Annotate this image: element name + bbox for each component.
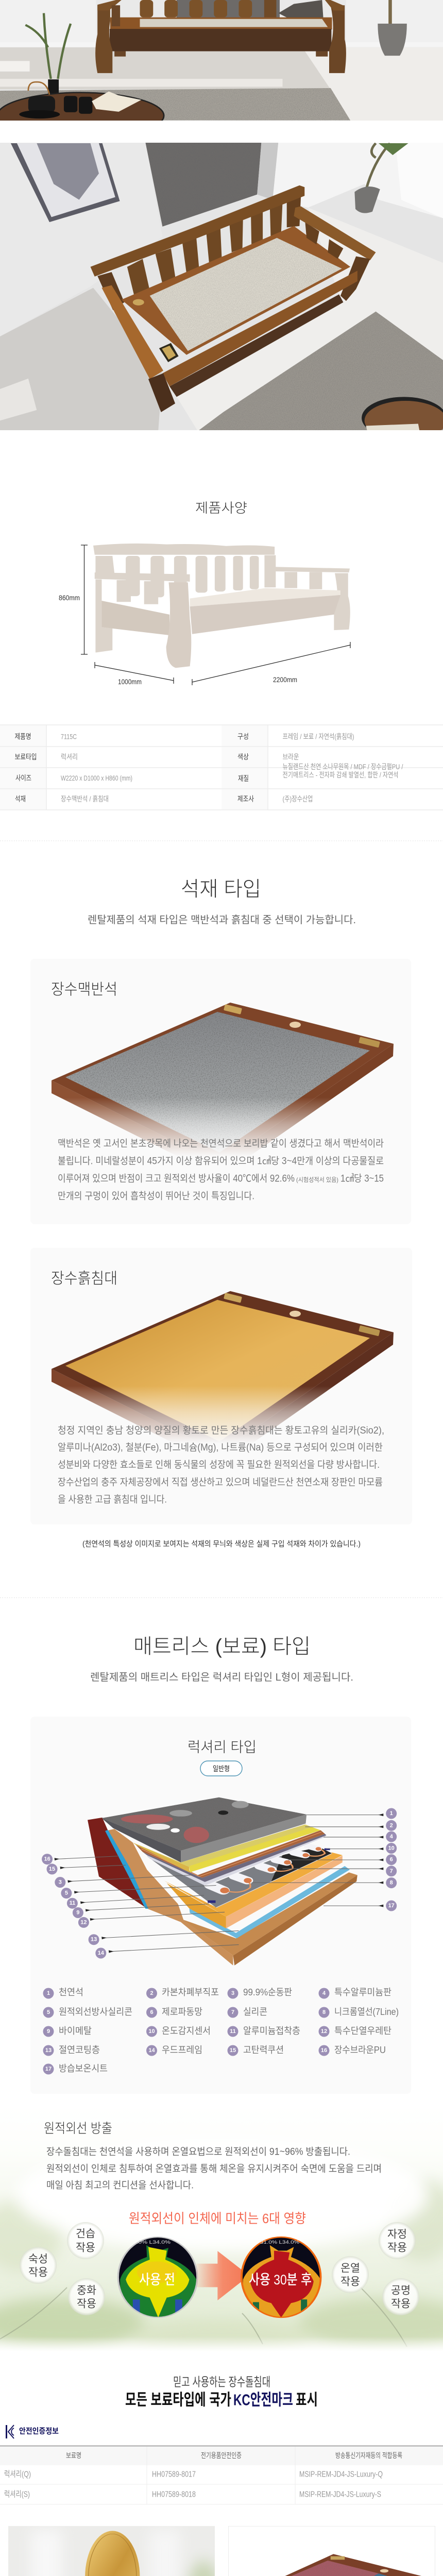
legend: numbered layer list: 15: [230, 2047, 236, 2054]
photo: sofa front view: [0, 0, 443, 121]
table: product specifications: W2220 x D1000 x H860 (mm): [61, 774, 132, 782]
callout badges: layer numbers: 7: [390, 1868, 393, 1874]
table: KC certification: MSIP-REM-JD4-JS-Luxury-S: [299, 2490, 381, 2499]
heading: KC safety mark: 모든 보료타입에 국가: [125, 2391, 231, 2409]
text block: elvan stone description: [58, 1138, 384, 1201]
table: product specifications: 뉴질랜드산 천연 소나무원목 / MDF / 장수금펄PU /: [282, 762, 403, 771]
table: product specifications: 색상: [237, 753, 249, 761]
table: KC certification: HH07589-8017: [152, 2470, 196, 2479]
callout badges: layer numbers: 5: [65, 1890, 68, 1896]
text block: far-infrared description: 매일 아침 최고의 컨디션을 선사합니다.: [46, 2179, 194, 2191]
button: standard: 일반형: [213, 1765, 230, 1773]
thermal image: before use: .0% L34.0%: [137, 2240, 171, 2245]
text block: elvan stone description: (시험성적서 있음): [296, 1176, 338, 1183]
text block: clay bed description: 알루미나(Al2o3), 철분(Fe), 마그네슘(Mg), 나트륨(Na) 등으로 구성되어 있으며 이러한: [58, 1442, 383, 1453]
heading: six effects: 원적외선이 인체에 미치는 6대 영향: [129, 2211, 306, 2226]
legend: numbered layer list: 11: [230, 2028, 236, 2035]
legend: numbered layer list: 5: [47, 2009, 50, 2015]
callout badges: layer numbers: 1: [390, 1810, 393, 1817]
heading: KC safety mark: 표시: [296, 2391, 318, 2409]
legend: numbered layer list: 특수알루미늄판: [334, 1987, 391, 1997]
table: product specifications: 보료타입: [14, 753, 37, 761]
bubble: 건습 작용: 건습: [76, 2228, 95, 2240]
text block: elvan stone description: 만개의 구멍이 있어 흡착성이 뛰어난 것이 특징입니다.: [58, 1190, 254, 1201]
table: KC certification: 전기용품안전인증: [201, 2451, 242, 2460]
callout badges: layer numbers: 2: [390, 1822, 393, 1828]
text block: elvan stone description: 맥반석은 옛 고서인 본초강목에 나오는 천연석으로 보리밥 같이 생겼다고 해서 맥반석이라: [58, 1138, 384, 1149]
legend: numbered layer list: 14: [148, 2047, 155, 2054]
text block: elvan stone description: 1㎤당 3~15: [340, 1173, 384, 1184]
heading: trusted bed: 믿고 사용하는 장수돌침대: [173, 2375, 270, 2389]
legend: numbered layer list: 7: [231, 2009, 234, 2015]
table: product specifications: 장수맥반석 / 흙침대: [61, 794, 109, 803]
image: elvan stone slab: [46, 1003, 397, 1182]
legend: numbered layer list: 3: [231, 1990, 234, 1996]
legend: numbered layer list: 9: [47, 2028, 50, 2035]
table: KC certification: 럭셔리(S): [4, 2489, 30, 2499]
bubble: 건습 작용: 작용: [76, 2242, 95, 2253]
legend: numbered layer list: 99.9%순동판: [243, 1987, 292, 1997]
button: standard: [200, 1761, 242, 1776]
legend: numbered layer list: 우드프레임: [162, 2045, 202, 2055]
card: gold mark: [8, 2526, 219, 2576]
thermal image: after 30 minutes: 사용 30분 후: [249, 2272, 312, 2287]
text block: clay bed description: 청정 지역인 충남 청양의 양질의 황토로 만든 장수흙침대는 황토고유의 실리카(Sio2),: [58, 1425, 384, 1436]
title: product spec: 제품사양: [195, 500, 247, 516]
table: KC certification: 보료명: [66, 2451, 81, 2460]
thermal image: after 30 minutes: [242, 2237, 321, 2318]
legend: numbered layer list: 10: [148, 2028, 155, 2035]
callout badges: layer numbers: 9: [76, 1909, 79, 1916]
legend: numbered layer list: 8: [322, 2009, 326, 2015]
heading: elvan stone: 장수맥반석: [51, 981, 117, 998]
heading: far-infrared emission: 원적외선 방출: [44, 2121, 112, 2136]
table: KC certification: 럭셔리(Q): [4, 2470, 31, 2479]
legend: numbered layer list: 바이메탈: [59, 2026, 92, 2036]
text block: clay bed description: 을 사용한 고급 흙침대 입니다.: [58, 1494, 167, 1505]
callout badges: layer numbers: 16: [44, 1856, 50, 1862]
heading: KC safety mark: KC안전마크: [233, 2391, 293, 2409]
text block: clay bed description: 장수산업의 충주 자체공장에서 직접 생산하고 있으며 네덜란드산 천연소재 장판인 마모륨: [58, 1477, 383, 1488]
subheading: stone type: 렌탈제품의 석재 타입은 맥반석과 흙침대 중 선택이 가능합니다.: [88, 914, 356, 926]
thermal image: before use: 사용 전: [139, 2272, 175, 2287]
legend: numbered layer list: 2: [150, 1990, 154, 1996]
bubble: 숙성 작용: 작용: [28, 2267, 48, 2278]
bubble: 중화 작용: 중화: [77, 2284, 96, 2297]
text block: far-infrared description: 장수돌침대는 천연석을 사용하며 온열요법으로 원적외선이 91~96% 방출됩니다.: [46, 2146, 350, 2158]
table: KC certification: 방송통신기자재등의 적합등록: [335, 2451, 402, 2460]
callout badges: layer numbers: 10: [388, 1845, 395, 1852]
card: 2-way heating: [228, 2526, 435, 2576]
legend: numbered layer list: 17: [45, 2066, 52, 2072]
panel: clay bed: [30, 1248, 412, 1524]
legend: numbered layer list: 1: [47, 1990, 50, 1996]
bubble: 건습 작용: [67, 2222, 104, 2259]
callout badges: layer numbers: 11: [70, 1900, 75, 1906]
background: blurred forest: [0, 2164, 443, 2349]
table: product specifications: 7115C: [61, 733, 77, 741]
bubble: 숙성 작용: [20, 2247, 57, 2284]
table: product specifications: 브라운: [282, 753, 299, 761]
thermal image: after 30 minutes: 31.0% L34.0%: [260, 2240, 299, 2245]
bubble: 자정 작용: [379, 2222, 416, 2259]
diagram: sofa with dimensions: [93, 544, 350, 668]
arrow: before to after: [196, 2251, 249, 2300]
bubble: 공명 작용: 작용: [391, 2298, 411, 2310]
callout badges: layer numbers: 14: [98, 1950, 105, 1956]
table: KC certification: [0, 2446, 443, 2504]
dimension line: height 860mm: [81, 545, 88, 654]
legend: numbered layer list: 고탄력쿠션: [243, 2045, 284, 2055]
legend: numbered layer list: 니크롬열선(7Line): [334, 2007, 399, 2017]
callout badges: layer numbers: 8: [390, 1880, 393, 1886]
text block: far-infrared description: 원적외선이 인체로 침투하여 온열효과를 통해 체온을 유지시켜주어 숙면에 도움을 드리며: [46, 2163, 382, 2174]
legend: numbered layer list: 4: [322, 1990, 326, 1996]
legend: numbered layer list: 원적외선방사실리콘: [59, 2007, 132, 2017]
table: product specifications: 석재: [15, 794, 26, 803]
bubble: 온열 작용: 작용: [340, 2276, 360, 2287]
bubble: 공명 작용: [382, 2278, 419, 2315]
callout badges: layer numbers: 12: [80, 1919, 87, 1925]
callout badges: layer numbers: 13: [91, 1937, 97, 1943]
legend: numbered layer list: 13: [45, 2047, 52, 2054]
table: product specifications: (주)장수산업: [282, 794, 313, 803]
legend: numbered layer list: 알루미늄접착층: [243, 2026, 300, 2036]
legend: numbered layer list: 6: [150, 2009, 154, 2015]
legend: numbered layer list: 천연석: [59, 1987, 83, 1997]
legend: numbered layer list: 제로파동망: [162, 2007, 202, 2017]
table: product specifications: 제품명: [14, 733, 31, 741]
callout badges: layer numbers: 17: [388, 1903, 395, 1909]
legend: numbered layer list: 온도감지센서: [162, 2026, 211, 2036]
table: product specifications: 사이즈: [15, 774, 31, 782]
label: safety certification info: 안전인증정보: [19, 2427, 59, 2436]
callout badges: layer numbers: 4: [390, 1834, 394, 1840]
table: product specifications: [0, 725, 443, 810]
table: KC certification: HH07589-8018: [152, 2490, 196, 2499]
bubble: 자정 작용: 자정: [387, 2229, 407, 2240]
legend: numbered layer list: 16: [321, 2047, 327, 2054]
table: KC certification: MSIP-REM-JD4-JS-Luxury-Q: [299, 2470, 383, 2479]
thermal image: before use: [118, 2237, 197, 2318]
table: product specifications: 럭셔리: [61, 753, 78, 761]
callout badges: layer numbers: [42, 1808, 397, 1959]
image: clay slab: [46, 1291, 397, 1469]
text block: clay bed description: [58, 1425, 384, 1505]
legend: numbered layer list: 12: [321, 2028, 327, 2035]
text block: elvan stone description: 불립니다. 미네랄성분이 45가지 이상 함유되어 있으며 1㎤당 3~4만개 이상의 다공물질로: [58, 1155, 384, 1166]
legend: numbered layer list: 절연코팅층: [59, 2045, 100, 2055]
heading: luxury type: 럭셔리 타입: [188, 1739, 257, 1755]
table: product specifications: 재질: [238, 774, 249, 783]
legend: numbered layer list: 장수브라운PU: [334, 2045, 386, 2055]
bubble: 숙성 작용: 숙성: [28, 2253, 48, 2265]
bubble: 공명 작용: 공명: [391, 2284, 411, 2297]
callout badges: layer numbers: 3: [59, 1879, 62, 1886]
panel: elvan stone: [30, 959, 411, 1224]
bubble: 온열 작용: 온열: [340, 2263, 360, 2274]
legend: numbered layer list: 실리콘: [243, 2007, 267, 2017]
table: product specifications: 구성: [237, 733, 249, 741]
text block: elvan stone description: 이루어져 있으며 반점이 크고 원적외선 방사율이 40℃에서 92.6%: [58, 1173, 295, 1184]
heading: clay bed: 장수흙침대: [51, 1270, 117, 1287]
label: 2200mm: 2200mm: [273, 675, 297, 684]
legend: numbered layer list: 방습보온시트: [59, 2063, 108, 2074]
text block: far-infrared description: [46, 2146, 382, 2191]
bubble: 중화 작용: [68, 2278, 105, 2315]
dimension line: width 2200mm: [192, 642, 350, 685]
bubble: 자정 작용: 작용: [387, 2242, 407, 2253]
table: product specifications: 전기매트리스 - 전자파 감쇄 발열선, 합판 / 자연석: [282, 771, 399, 779]
panel: luxury type: [30, 1717, 411, 2094]
table: product specifications: 제조사: [237, 794, 254, 803]
heading: mattress type: 매트리스 (보료) 타입: [133, 1635, 311, 1658]
label: 1000mm: 1000mm: [118, 677, 142, 686]
text block: clay bed description: 성분비와 다양한 효소들로 인해 동식물의 성장에 꼭 필요한 원적외선을 다량 방사합니다.: [58, 1459, 380, 1470]
legend: numbered layer list: [43, 1987, 399, 2074]
photo: sofa from above: [0, 143, 443, 440]
legend: numbered layer list: 카본차폐부직포: [162, 1987, 219, 1997]
diagram: layered mattress cross-section: [59, 1798, 379, 1965]
subheading: mattress type: 렌탈제품의 매트리스 타입은 럭셔리 타입인 L형이 제공됩니다.: [90, 1671, 353, 1683]
table: product specifications: 프레임 / 보료 / 자연석(흙침대): [282, 733, 354, 741]
callout badges: layer numbers: 15: [49, 1866, 55, 1872]
note: natural stone disclaimer: (천연석의 특성상 이미지로 보여지는 석재의 무늬와 색상은 실제 구입 석재와 차이가 있습니다.): [82, 1539, 361, 1549]
legend: numbered layer list: 특수단열우레탄: [334, 2026, 391, 2036]
label: 860mm: 860mm: [59, 594, 80, 602]
heading: stone type: 석재 타입: [181, 878, 261, 901]
bubble: 온열 작용: [332, 2256, 369, 2293]
callout badges: layer numbers: 6: [390, 1857, 393, 1863]
dimension line: depth 1000mm: [95, 662, 174, 684]
bubble: 중화 작용: 작용: [77, 2298, 96, 2310]
icon: KC mark: [6, 2425, 14, 2438]
